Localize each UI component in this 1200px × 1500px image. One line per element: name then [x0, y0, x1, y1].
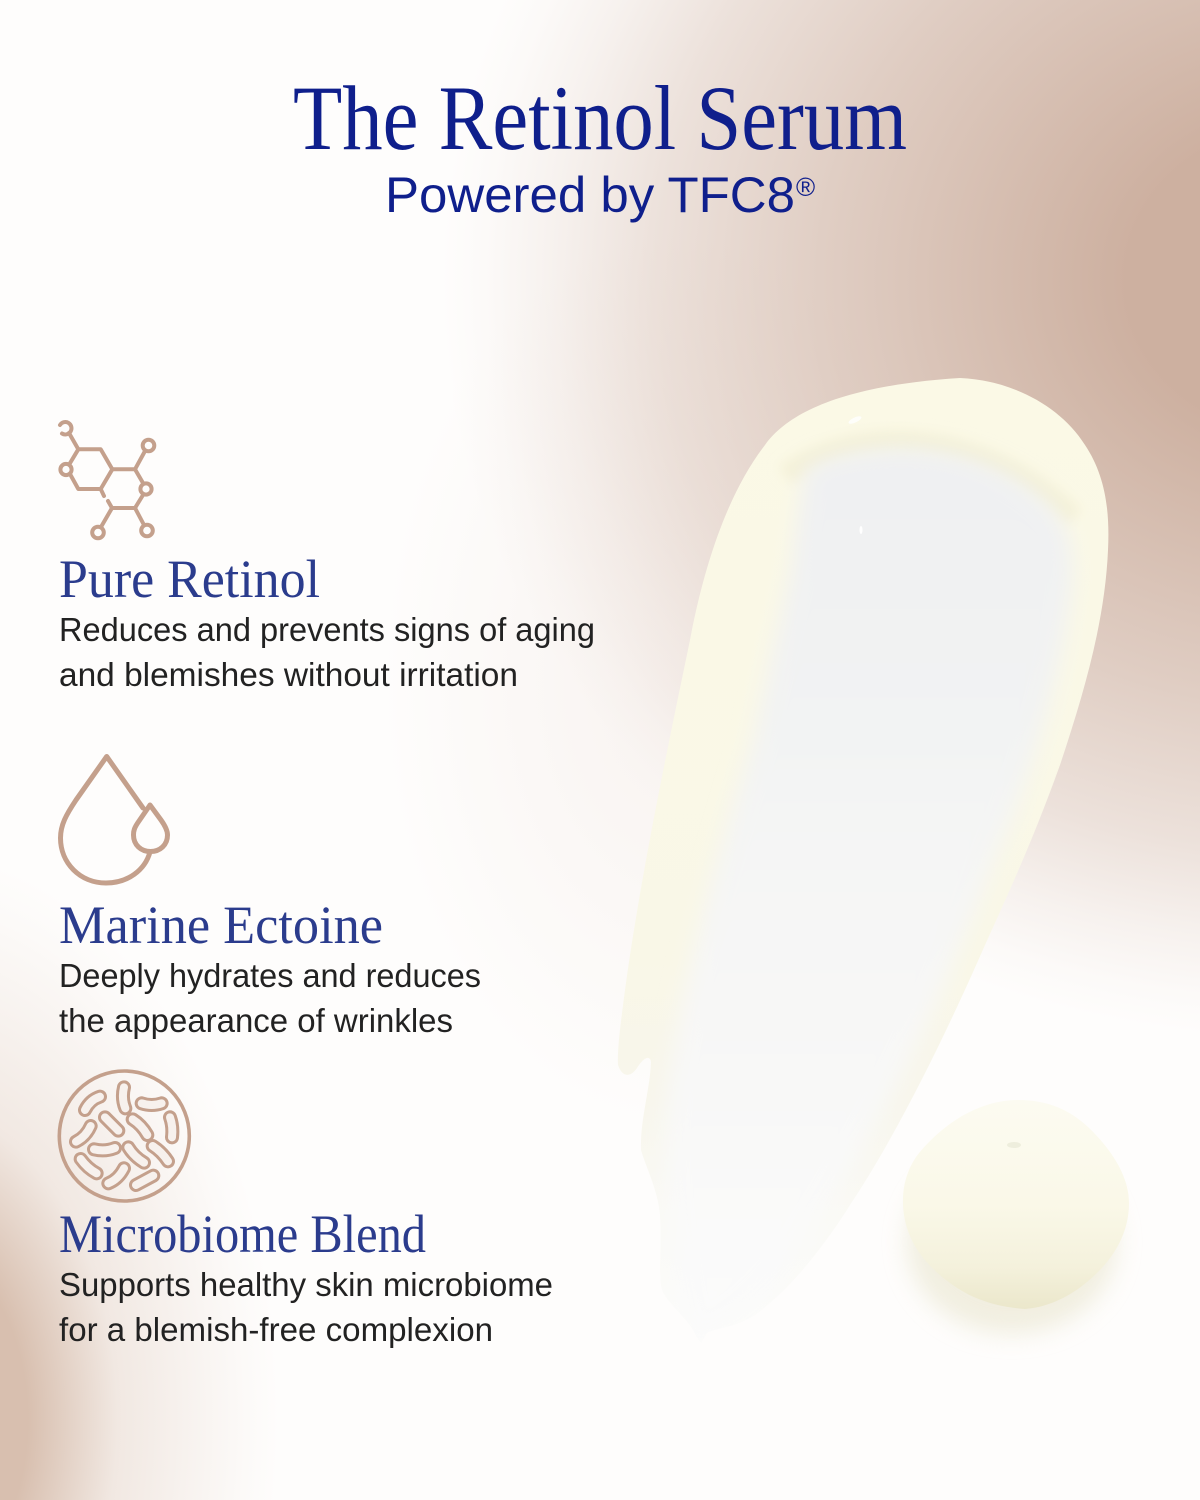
heading: Marine Ectoine: Marine Ectoine: [59, 895, 383, 955]
subtitle: Powered by TFC8: [385, 167, 795, 223]
text: Microbiome Blend description: [59, 1266, 553, 1348]
icon: molecule: [60, 422, 154, 538]
text: Marine Ectoine description: the appearance of wrinkles: [59, 1002, 453, 1039]
text: Pure Retinol description: Reduces and prevents signs of aging: [59, 611, 595, 648]
icon: microbiome: [59, 1071, 189, 1201]
cream smear: [618, 378, 1108, 1202]
icon: water drops: [60, 756, 168, 883]
subtitle: ®: [796, 172, 815, 202]
heading: Pure Retinol: Pure Retinol: [59, 549, 320, 609]
cream drop: [903, 1100, 1129, 1334]
heading: Microbiome Blend: Microbiome Blend: [59, 1204, 426, 1264]
title: The Retinol Serum: [293, 67, 907, 169]
text: Pure Retinol description: [59, 611, 595, 693]
text: Microbiome Blend description: for a blemish-free complexion: [59, 1311, 493, 1348]
text: Marine Ectoine description: Deeply hydrates and reduces: [59, 957, 481, 994]
text: Pure Retinol description: and blemishes without irritation: [59, 656, 518, 693]
text: Microbiome Blend description: Supports healthy skin microbiome: [59, 1266, 553, 1303]
text: Marine Ectoine description: [59, 957, 481, 1039]
